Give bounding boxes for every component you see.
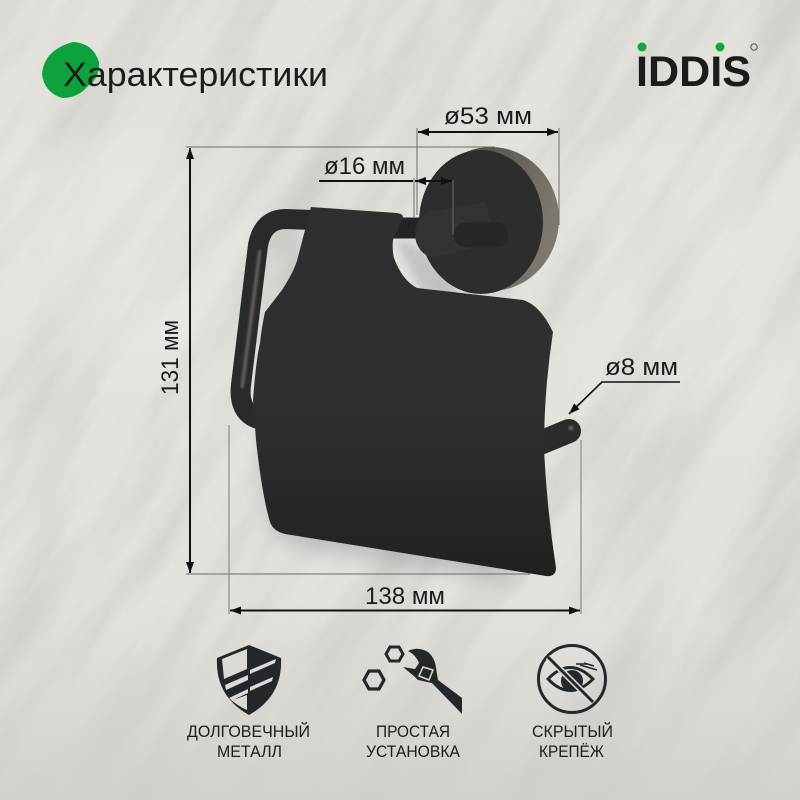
post and pin [415, 202, 498, 257]
label: durable metal: ДОЛГОВЕЧНЫЙ [187, 722, 310, 741]
dimension: 131 mm: 131 мм [157, 320, 184, 395]
dimension: 8 mm [569, 354, 680, 414]
dimension: 16 mm [319, 153, 453, 235]
title: Характеристики [63, 56, 328, 94]
title [42, 42, 328, 98]
nut large [364, 671, 384, 689]
label: hidden fastening: КРЕПЁЖ [539, 742, 604, 761]
dimension: 131 mm [157, 147, 530, 574]
wall plate [419, 147, 559, 294]
dimension: 138 mm [229, 425, 581, 614]
dimension: 8 mm: ø8 мм [605, 354, 678, 381]
dimension: 53 mm [417, 103, 559, 225]
wrench [403, 649, 462, 714]
dimension: 138 mm: 138 мм [365, 583, 445, 610]
product: toilet paper holder [241, 147, 573, 585]
wire arm [241, 219, 425, 419]
icon: crossed-out eye [538, 646, 606, 712]
label: hidden fastening [532, 722, 613, 761]
icon: wrench and nuts [364, 647, 462, 714]
label: easy installation: УСТАНОВКА [366, 742, 461, 761]
label: durable metal [187, 722, 310, 761]
dimension: 16 mm: ø16 мм [324, 153, 405, 180]
green blob [42, 42, 99, 98]
cast shadow [262, 238, 530, 585]
nut small [386, 647, 403, 661]
label: easy installation: ПРОСТАЯ [376, 722, 450, 741]
dimension: 53 mm: ø53 мм [444, 103, 532, 130]
label: easy installation [366, 722, 461, 761]
label: durable metal: МЕТАЛЛ [217, 742, 282, 761]
cover [253, 207, 556, 576]
right pin [535, 426, 574, 445]
label: hidden fastening: СКРЫТЫЙ [532, 722, 613, 741]
logo: IDDIS: IDDIS [636, 48, 751, 96]
icon: shield [217, 645, 281, 715]
